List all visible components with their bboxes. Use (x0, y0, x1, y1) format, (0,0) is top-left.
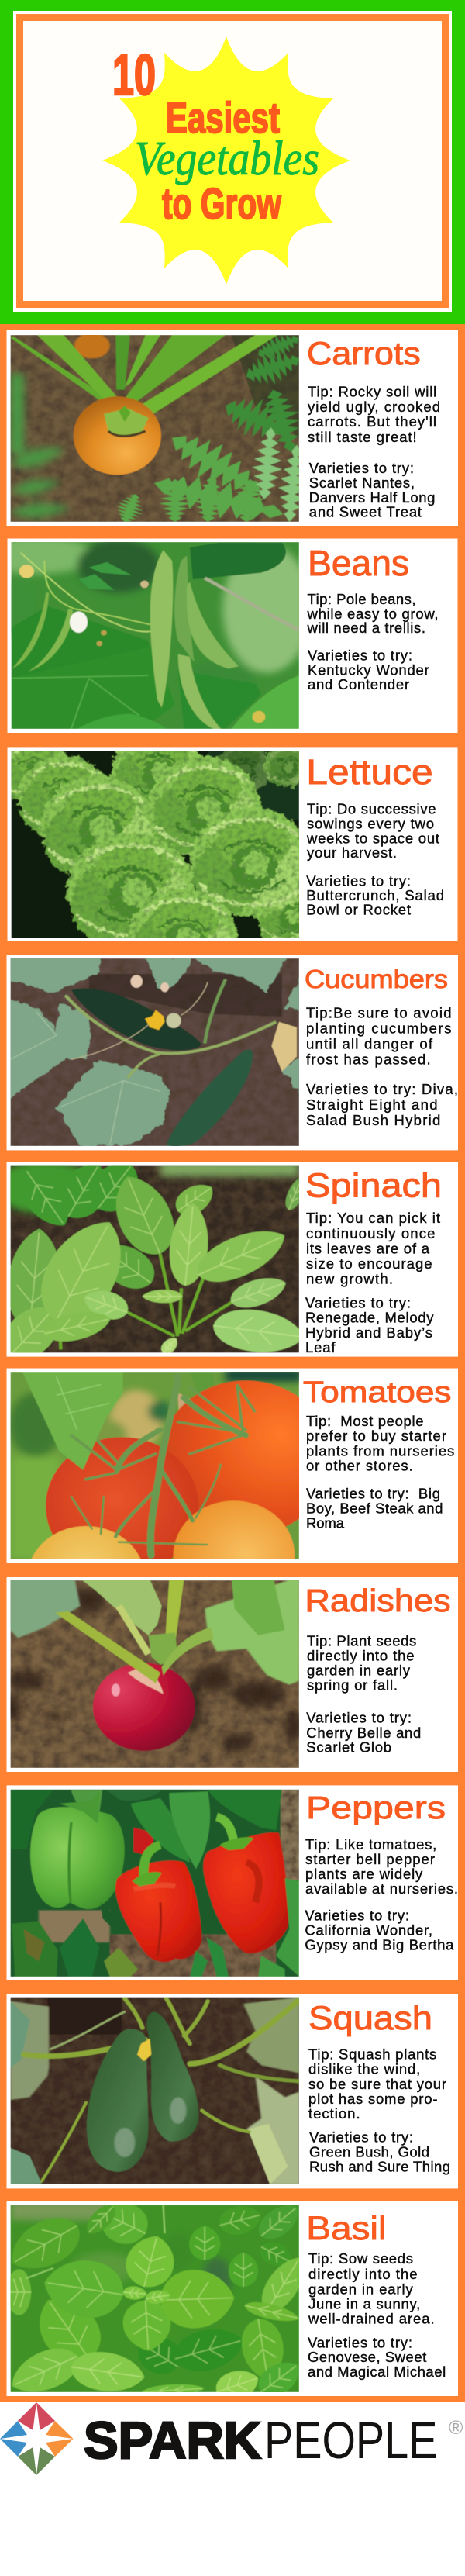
varieties text: Varieties to try: (306, 873, 411, 889)
varieties text (305, 1908, 454, 1953)
varieties text (308, 2334, 446, 2380)
varieties text (306, 873, 444, 918)
varieties text: Gypsy and Big Bertha (305, 1937, 454, 1953)
varieties text: and Sweet Treat (309, 504, 422, 520)
tip text: Tip: Squash plants (308, 2046, 436, 2062)
tip text: continuously once (306, 1225, 435, 1241)
photo: radish (11, 1580, 299, 1768)
tip text (306, 1005, 451, 1067)
tip text (308, 384, 440, 445)
tip text: plants are widely (305, 1866, 423, 1882)
panel: radishes (3, 1576, 458, 1772)
varieties text: Buttercrunch, Salad (306, 887, 444, 903)
varieties text: Green Bush, Gold (309, 2143, 429, 2160)
registered mark: ® (449, 2417, 463, 2439)
tip text: weeks to space out (306, 830, 439, 846)
tip text: Tip: Pole beans, (307, 591, 415, 607)
varieties text (306, 1709, 421, 1755)
tip text: size to encourage (306, 1255, 432, 1272)
tip text (306, 1413, 454, 1474)
panel: squash (6, 1994, 458, 2188)
tip text: yield ugly, crooked (308, 399, 440, 415)
tip text: while easy to grow, (307, 606, 439, 622)
tip text: prefer to buy starter (306, 1428, 446, 1444)
varieties text: Scarlet Glob (306, 1739, 391, 1755)
tip text (307, 591, 439, 636)
tip text: will need a trellis. (307, 620, 425, 636)
header banner (0, 0, 465, 324)
tip text: so be sure that your (308, 2076, 446, 2092)
photo: bean pods (11, 542, 299, 729)
heading: Spinach: Spinach (305, 1167, 442, 1205)
tip text: Tip: Most people (306, 1413, 423, 1429)
varieties text: and Contender (308, 676, 409, 692)
photo: lettuce heads (11, 751, 299, 938)
varieties text: Varieties to try: (308, 2334, 412, 2350)
varieties text (306, 1486, 443, 1531)
logo: SparkPeople (0, 2402, 463, 2475)
tip text (305, 1836, 458, 1897)
tip text: plants from nurseries (306, 1442, 454, 1459)
varieties text: Scarlet Nantes, (309, 475, 415, 491)
wordmark (84, 2412, 437, 2470)
tip text: starter bell pepper (305, 1851, 435, 1867)
varieties text: Leaf (305, 1339, 336, 1355)
heading: Tomatoes: Tomatoes (303, 1376, 451, 1409)
tip text: frost has passed. (306, 1051, 431, 1067)
varieties text: Hybrid and Baby’s (305, 1324, 432, 1341)
heading: Radishes: Radishes (305, 1583, 451, 1618)
varieties text: Varieties to try: (309, 2129, 413, 2145)
title: Vegetables (135, 133, 319, 185)
varieties text: Varieties to try: (305, 1908, 409, 1924)
varieties text: Bowl or Rocket (306, 902, 411, 918)
tip text: sowings every two (307, 816, 434, 831)
icon: diamond star (0, 2402, 73, 2475)
photo: basil (11, 2205, 299, 2392)
varieties text (305, 1295, 434, 1355)
panel: cucumbers (6, 955, 458, 1150)
tip text: Tip: Rocky soil will (308, 384, 436, 400)
tip text: until all danger of (306, 1036, 433, 1052)
tip text (308, 2046, 446, 2122)
heading: Squash: Squash (308, 2000, 432, 2037)
heading: Beans: Beans (308, 543, 409, 583)
tip text: planting cucumbers (306, 1020, 451, 1037)
panel: spinach (0, 1153, 458, 1367)
varieties text: Straight Eight and (306, 1096, 437, 1113)
tip text: your harvest. (307, 844, 397, 861)
tip text: Tip:Be sure to avoid (306, 1005, 451, 1021)
varieties text: Varieties to try: (309, 460, 414, 476)
varieties text (308, 647, 429, 692)
tip text: June in a sunny, (308, 2295, 420, 2312)
tip text (308, 2250, 435, 2327)
tip text: garden in early (308, 2281, 413, 2297)
tip text: spring or fall. (307, 1676, 398, 1694)
tip text: directly into the (307, 1648, 415, 1664)
varieties text: Danvers Half Long (309, 489, 435, 506)
heading: Cucumbers: Cucumbers (305, 965, 448, 993)
tip text: or other stores. (306, 1458, 413, 1474)
varieties text: Genovese, Sweet (308, 2349, 426, 2365)
heading: Lettuce: Lettuce (306, 752, 433, 792)
tip text: dislike the wind, (308, 2060, 420, 2077)
heading: Carrots: Carrots (307, 335, 421, 371)
tip text: still taste great! (308, 429, 417, 445)
tip text (306, 800, 439, 861)
varieties text: Varieties to try: (306, 1709, 412, 1726)
wordmark: SPARK (84, 2412, 261, 2470)
photo: tomatoes on the vine (11, 1372, 299, 1559)
title: Easiest (166, 93, 280, 142)
tip text: directly into the (308, 2266, 417, 2282)
tip text: available at nurseries. (305, 1880, 458, 1897)
panel: tomatoes (6, 1368, 458, 1633)
varieties text: Kentucky Wonder (308, 661, 429, 678)
varieties text (309, 2129, 450, 2174)
tip text: garden in early (307, 1663, 411, 1678)
varieties text: Rush and Sure Thing (309, 2158, 450, 2174)
varieties text: Roma (306, 1514, 345, 1531)
tip text: plot has some pro- (308, 2091, 437, 2107)
panel: carrots (6, 326, 458, 534)
photo: bell peppers (11, 1790, 299, 1977)
varieties text: Varieties to try: Big (306, 1486, 440, 1501)
photo: carrot in soil (11, 335, 299, 522)
varieties text: Renegade, Melody (305, 1310, 434, 1326)
tip text (306, 1210, 440, 1287)
photo: cucumbers on soil (11, 958, 299, 1146)
varieties text: California Wonder, (305, 1922, 432, 1939)
tip text: Tip: Like tomatoes, (305, 1836, 436, 1853)
panel: lettuce (0, 730, 457, 993)
varieties text: Boy, Beef Steak and (306, 1500, 443, 1516)
tip text: its leaves are of a (306, 1240, 430, 1256)
heading: Peppers: Peppers (306, 1790, 446, 1825)
varieties text: and Magical Michael (308, 2364, 446, 2380)
varieties text: Varieties to try: (308, 647, 412, 664)
title (112, 43, 319, 229)
tip text: well-drained area. (308, 2311, 435, 2327)
varieties text: Varieties to try: (305, 1295, 411, 1311)
tip text: Tip: Do successive (307, 800, 436, 817)
tip text: Tip: You can pick it (306, 1210, 440, 1226)
tip text: Tip: Sow seeds (308, 2250, 413, 2267)
varieties text: Salad Bush Hybrid (306, 1112, 440, 1128)
varieties text (306, 1081, 458, 1128)
tip text: new growth. (306, 1271, 393, 1287)
tip text: Tip: Plant seeds (307, 1633, 416, 1649)
panel: peppers (6, 1785, 458, 1980)
photo: squash (11, 1998, 299, 2184)
heading: Basil: Basil (306, 2210, 387, 2247)
tip text (307, 1633, 416, 1694)
icon: yellow starburst (102, 36, 350, 285)
tip text: carrots. But they'll (308, 413, 436, 430)
photo: spinach (11, 1166, 299, 1352)
tip text: tection. (308, 2105, 360, 2122)
varieties text: Cherry Belle and (306, 1725, 421, 1741)
varieties text: Varieties to try: Diva, (306, 1081, 458, 1097)
panel: beans (0, 537, 457, 733)
panel: basil (0, 2194, 458, 2405)
title: to Grow (162, 179, 281, 229)
title: 10 (112, 43, 156, 107)
varieties text (309, 460, 435, 520)
